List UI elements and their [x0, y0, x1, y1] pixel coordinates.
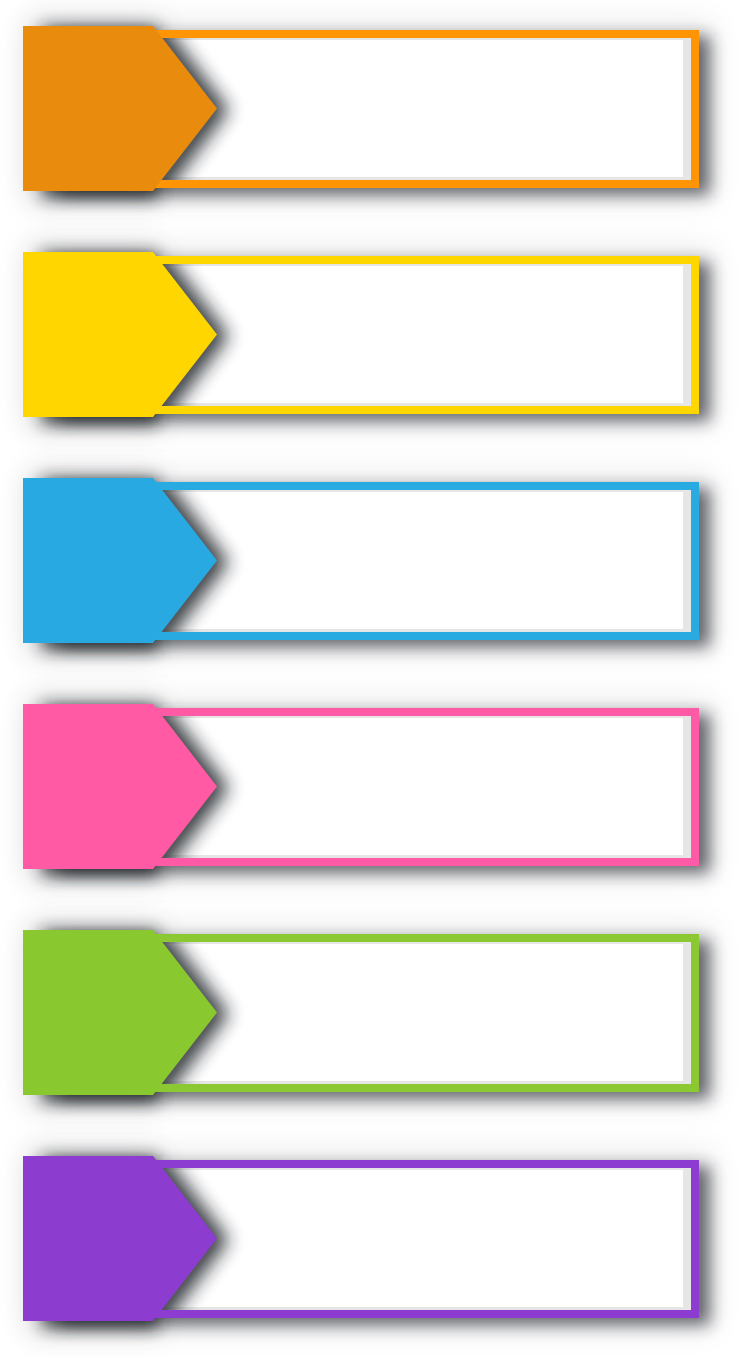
banner 2: yellow — [23, 242, 714, 432]
frame: yellow — [150, 256, 699, 414]
banner 4: pink — [23, 694, 714, 884]
banner 3: blue — [23, 468, 714, 658]
frame: orange — [150, 30, 699, 188]
frame: blue — [150, 482, 699, 640]
arrow tab: orange — [23, 26, 217, 191]
arrow tab: blue — [23, 478, 217, 643]
arrow tab: purple — [23, 1156, 217, 1321]
arrow tab: yellow — [23, 252, 217, 417]
banner 5: green — [23, 920, 714, 1110]
banner 6: purple — [23, 1146, 714, 1336]
banner 1: orange — [23, 16, 714, 206]
frame: purple — [150, 1160, 699, 1318]
frame: green — [150, 934, 699, 1092]
frame: pink — [150, 708, 699, 866]
arrow tab: green — [23, 930, 217, 1095]
arrow tab: pink — [23, 704, 217, 869]
